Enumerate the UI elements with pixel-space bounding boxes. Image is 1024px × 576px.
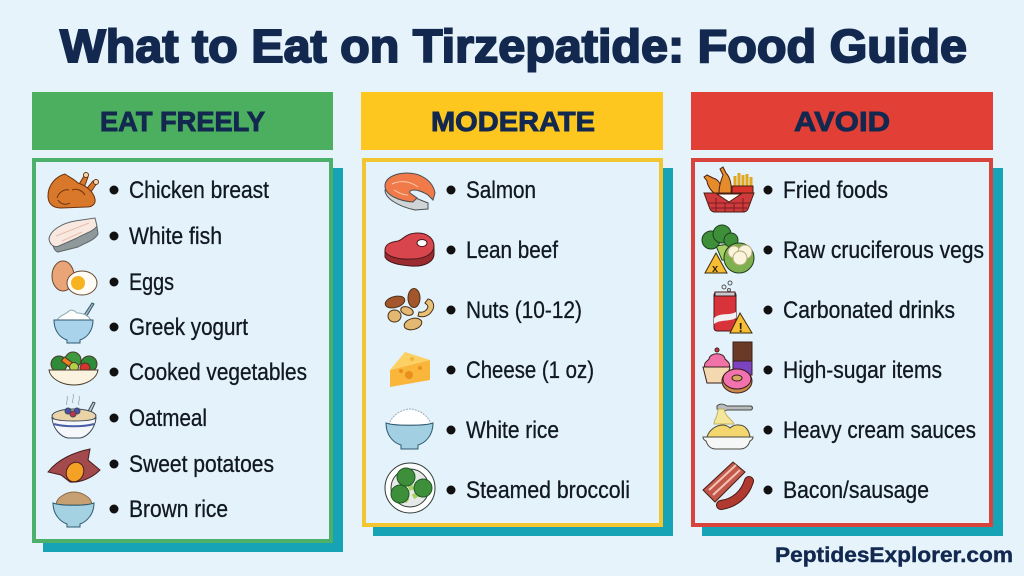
icon: cooked vegetables (49, 352, 98, 385)
list: avoid (764, 177, 984, 504)
title: What to Eat on Tirzepatide: Food Guide (60, 20, 967, 72)
list: avoid: Heavy cream sauces (783, 417, 976, 444)
panel shadow: eat freely (43, 168, 343, 552)
icon: lean beef (385, 233, 434, 266)
list: moderate: Lean beef (466, 237, 558, 264)
heading: eat freely (32, 92, 333, 150)
icon: greek yogurt (54, 303, 94, 343)
list: eat freely: Oatmeal (129, 405, 207, 432)
icon: heavy cream sauces (703, 404, 753, 449)
list: eat freely: Brown rice (129, 496, 228, 523)
icon: raw cruciferous vegs: x (712, 263, 719, 275)
icon: white rice (386, 409, 433, 449)
list: avoid: Fried foods (783, 177, 888, 204)
heading: eat freely: EAT FREELY (100, 106, 265, 137)
list: eat freely: Chicken breast (129, 177, 269, 204)
panel: moderate (361, 92, 673, 536)
list: moderate (446, 177, 630, 504)
list: moderate: Salmon (466, 177, 536, 204)
icon: chicken (48, 172, 98, 208)
icon: cheese (390, 352, 430, 387)
list: avoid: High-sugar items (783, 357, 942, 384)
list: avoid: Raw cruciferous vegs (783, 237, 984, 264)
list: moderate: Steamed broccoli (466, 477, 630, 504)
icon: raw cruciferous vegs (702, 225, 754, 275)
icon: nuts (384, 288, 434, 332)
heading: avoid: AVOID (794, 106, 890, 137)
list: moderate: White rice (466, 417, 559, 444)
icon: high-sugar items (703, 342, 752, 393)
icon: carbonated drinks: ! (738, 320, 743, 335)
list box: avoid (693, 160, 991, 525)
panel: avoid (691, 92, 1003, 536)
list: eat freely (110, 177, 307, 523)
heading: moderate: MODERATE (431, 106, 595, 137)
list: moderate: Cheese (1 oz) (466, 357, 594, 384)
list box: eat freely (34, 160, 331, 541)
panel shadow: avoid (702, 168, 1003, 536)
footer brand: PeptidesExplorer.com (775, 544, 1013, 567)
icon: fried foods (704, 167, 754, 212)
list box: moderate (364, 160, 661, 525)
list: eat freely: Greek yogurt (129, 314, 248, 341)
heading: avoid (691, 92, 993, 150)
list: avoid: Carbonated drinks (783, 297, 955, 324)
list: eat freely: White fish (129, 223, 222, 250)
list: moderate: Nuts (10-12) (466, 297, 582, 324)
list: eat freely: Cooked vegetables (129, 359, 307, 386)
icon: bacon/sausage (703, 462, 749, 505)
icon: white fish (49, 218, 98, 252)
list: avoid: Bacon/sausage (783, 477, 929, 504)
list: eat freely: Eggs (129, 269, 174, 296)
icon: oatmeal (52, 394, 96, 438)
panel: eat freely (32, 92, 343, 552)
panel shadow: moderate (373, 168, 673, 536)
icon: salmon (385, 173, 435, 210)
icon: carbonated drinks (714, 281, 752, 335)
icon: brown rice (53, 492, 94, 527)
heading: moderate (361, 92, 663, 150)
list: eat freely: Sweet potatoes (129, 451, 274, 478)
icon: eggs (52, 261, 97, 295)
icon: steamed broccoli (385, 463, 435, 513)
icon: sweet potatoes (48, 449, 100, 485)
